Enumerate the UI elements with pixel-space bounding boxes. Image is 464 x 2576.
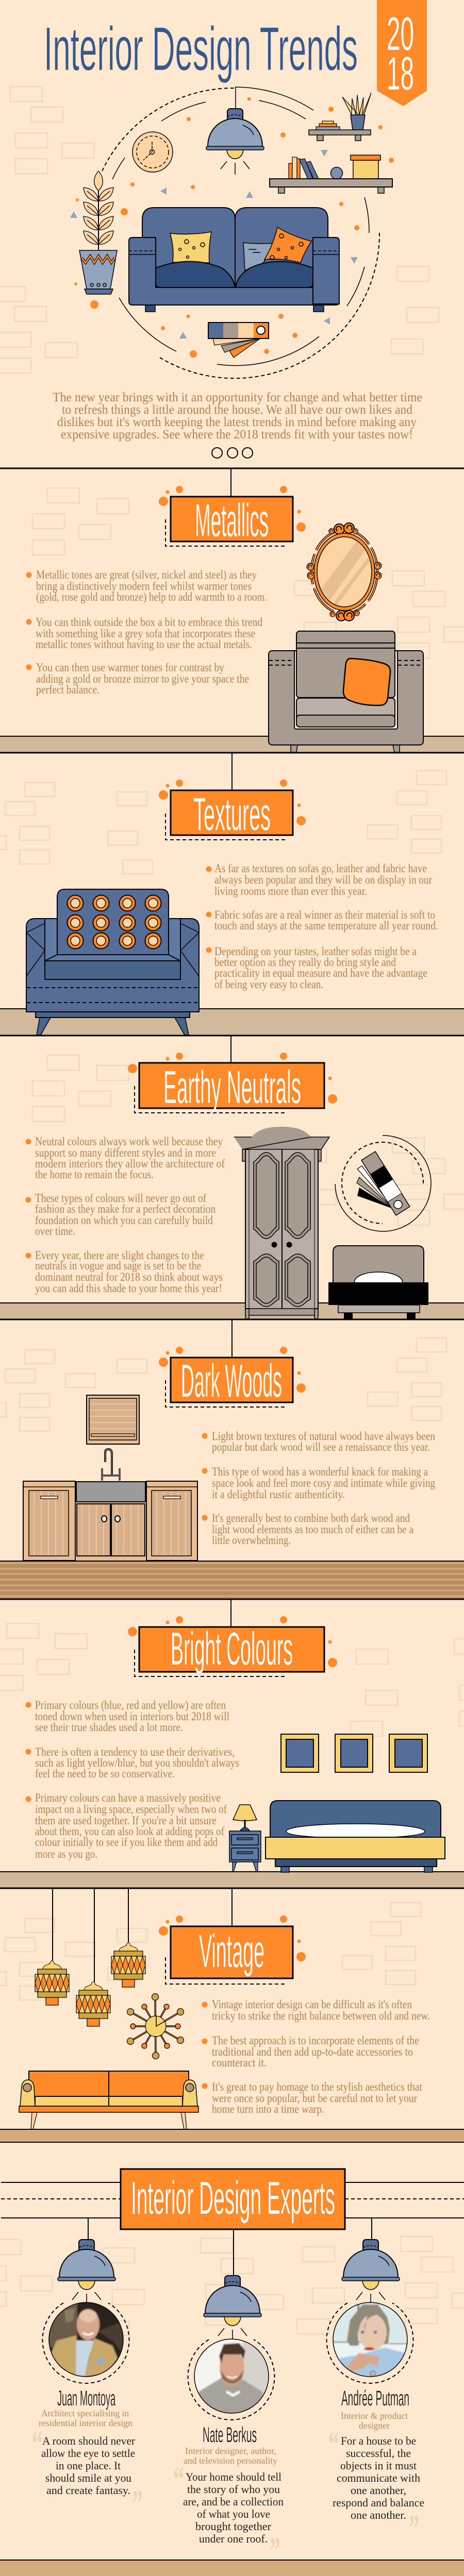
text: earthy bullets: you can add this shade to your home this year!	[35, 1282, 222, 1295]
metallics bricks	[32, 488, 464, 658]
vintage bricks	[0, 1903, 421, 2000]
quote: Nate Berkus	[173, 2460, 284, 2570]
intro text: The new year brings with it an opportunity for change and what better time	[53, 391, 422, 404]
text: dark woods bullets	[202, 1430, 435, 1547]
floor: textures	[0, 1009, 464, 1036]
text: vintage bullets: traditional and then add up-to-date accessories to	[212, 2045, 413, 2058]
expert: Andrée Putman: designer	[359, 2420, 390, 2431]
intro text: to refresh things a little around the house. We all have our own likes and	[62, 403, 412, 417]
text: metallics bullets: bring a distinctively modern feel whilst warmer tones	[36, 580, 252, 592]
text: vintage bullets	[202, 1998, 430, 2115]
quote: Juan Montoya: in one place. It	[56, 2459, 121, 2472]
heading: experts rail	[1, 2169, 464, 2229]
expert: Juan Montoya: residential interior design	[39, 2418, 132, 2428]
quote: Andrée Putman: successful, the	[346, 2447, 411, 2460]
text: vintage bullets: tricky to strike the right balance between old and new.	[212, 2009, 430, 2022]
text: earthy bullets: foundation on which you can carefully build	[35, 1214, 213, 1227]
icon: hanging lanterns	[35, 1888, 145, 2026]
icon: orange retro sofa	[19, 2071, 198, 2129]
quote: Andrée Putman: one another,	[351, 2484, 406, 2497]
text: bright bullets: see their true shades used a lot more.	[35, 1721, 183, 1734]
text: bright bullets: more as you go.	[35, 1848, 97, 1860]
quote: Juan Montoya: and create fantasy.	[46, 2484, 130, 2497]
bright bricks	[0, 1623, 464, 1736]
expert: Andrée Putman	[326, 2218, 424, 2548]
icon: grey armchair	[269, 631, 423, 752]
text: bright bullets: toned down when used in interiors but 2018 will	[35, 1710, 229, 1723]
floor: wooden boards	[0, 1561, 464, 1599]
icon: yellow bed	[266, 1801, 445, 1872]
text: bright bullets: about them, you can also look at adding pops of	[35, 1825, 224, 1838]
text: metallics bullets: You can think outside the box a bit to embrace this trend	[36, 616, 262, 629]
quote: Nate Berkus: under one roof.	[199, 2532, 268, 2545]
photo: Andrée Putman	[333, 2303, 407, 2376]
text: metallics bullets	[26, 568, 267, 696]
text: dark woods bullets: it a delightful rustic authenticity.	[212, 1488, 345, 1501]
text: textures bullets	[206, 862, 438, 991]
text: bright bullets: There is often a tendency to use their derivatives,	[35, 1745, 235, 1758]
panel: metallics	[0, 468, 464, 753]
heading: bright colours: Bright Colours	[171, 1623, 293, 1675]
heading: earthy neutrals	[128, 1053, 337, 1113]
quote: Juan Montoya: should smile at you	[45, 2471, 131, 2484]
expert: Nate Berkus: and television personality	[184, 2455, 277, 2466]
quote: Andrée Putman: one another.	[351, 2509, 406, 2521]
text: earthy bullets: Neutral colours always work well because they	[35, 1135, 223, 1148]
intro text: dislikes but it's worth keeping the latest trends in mind before making any	[57, 415, 417, 429]
text: vintage bullets: counteract it.	[212, 2056, 267, 2069]
text: vintage bullets: The best approach is to incorporate elements of the	[212, 2034, 419, 2047]
heading: metallics: Metallics	[195, 495, 269, 547]
panel: interior design experts	[0, 2169, 464, 2576]
quote: Nate Berkus: “	[173, 2460, 184, 2499]
floor: experts	[0, 2560, 464, 2576]
experts bricks	[0, 2236, 464, 2335]
text: textures bullets: As far as textures on sofas go, leather and fabric have	[214, 862, 427, 875]
heading: dark woods	[159, 1347, 306, 1407]
decorative dots	[74, 97, 394, 358]
text: bright bullets: Primary colours can have a massively positive	[35, 1791, 221, 1804]
text: metallics bullets: You can then use warmer tones for contrast by	[36, 661, 224, 674]
text: vintage bullets: were once so popular, but be careful not to let your	[212, 2092, 417, 2105]
quote: Juan Montoya: “	[32, 2424, 43, 2463]
icon: bedside table with lamp	[229, 1805, 261, 1872]
text: bright bullets: Primary colours (blue, red and yellow) are often	[35, 1699, 226, 1711]
text: earthy bullets: These types of colours will never go out of	[35, 1192, 206, 1205]
three circles divider	[212, 448, 253, 458]
text: vintage bullets: home turn into a time warp.	[212, 2103, 324, 2115]
panel: textures	[0, 753, 464, 1036]
text: vintage bullets: Vintage interior design can be difficult as it's often	[212, 1998, 412, 2011]
text: dark woods bullets: popular but dark wood will see a renaissance this year.	[212, 1440, 430, 1453]
panel: vintage	[0, 1888, 464, 2142]
icon: wall clock	[132, 132, 173, 172]
text: earthy bullets	[26, 1135, 225, 1295]
heading: vintage: Vintage	[199, 1926, 264, 1977]
text: metallics bullets: adding a gold or bronze mirror to give your space the	[36, 672, 249, 685]
text: earthy bullets: fashion as they make for a perfect decoration	[35, 1202, 216, 1215]
expert: Juan Montoya	[32, 2218, 143, 2523]
text: metallics bullets: Metallic tones are great (silver, nickel and steel) as they	[36, 568, 257, 581]
text: earthy bullets: the home to remain the focus.	[35, 1168, 154, 1181]
text: vintage bullets: It's great to pay homage to the stylish aesthetics that	[212, 2080, 423, 2093]
heading: textures	[159, 779, 306, 840]
quote: Nate Berkus: ”	[270, 2531, 280, 2570]
text: textures bullets: practicality in equal measure and have the advantage	[214, 967, 427, 979]
text: earthy bullets: Every year, there are slight changes to the	[35, 1249, 204, 1262]
panel: dark woods: Dark Woods	[181, 1355, 282, 1407]
quote: Nate Berkus: brought together	[195, 2520, 272, 2533]
floor: metallics	[0, 736, 464, 753]
panel: dark woods	[0, 1319, 464, 1599]
quote: Andrée Putman: “	[328, 2425, 339, 2464]
text: textures bullets: better option as they really do bring style and	[214, 956, 396, 969]
quote: Andrée Putman: ”	[409, 2509, 419, 2548]
expert: Andrée Putman: Interior & product	[341, 2411, 408, 2421]
dark woods bricks	[0, 1338, 446, 1431]
text: dark woods bullets: little overwhelming.	[212, 1534, 291, 1547]
icon: upper shelf with books and plant	[309, 93, 371, 141]
quote: Juan Montoya: allow the eye to settle	[41, 2447, 135, 2460]
quote: Juan Montoya	[32, 2424, 143, 2523]
expert: Juan Montoya: Architect specialising in	[41, 2408, 129, 2418]
text: earthy bullets: dominant neutral for 2018 so think about ways	[35, 1270, 223, 1283]
hero brick wall	[0, 87, 439, 373]
expert: Nate Berkus	[173, 2229, 284, 2570]
quote: Nate Berkus: the story of who you	[187, 2483, 280, 2496]
icon: neutral bed	[328, 1246, 428, 1319]
icon: kitchen window blind	[87, 1395, 139, 1444]
quote: Juan Montoya: A room should never	[42, 2434, 136, 2447]
text: earthy bullets: over time.	[35, 1225, 75, 1238]
icon: potted plant	[79, 171, 117, 294]
intro text: expensive upgrades. See where the 2018 trends fit with your tastes now!	[61, 428, 413, 442]
intro text	[53, 391, 422, 442]
photo: Nate Berkus	[195, 2339, 268, 2413]
text: metallics bullets: metallic tones without having to use the actual metals.	[36, 638, 252, 651]
quote: Juan Montoya: ”	[132, 2483, 143, 2523]
floor: vintage	[0, 2129, 464, 2142]
floor: earthy	[0, 1303, 464, 1319]
quote: Nate Berkus: of what you love	[197, 2507, 270, 2520]
text: earthy bullets: neutrals in vogue and sage is set to be the	[35, 1259, 201, 1272]
text: textures bullets: living rooms more than ever this year.	[214, 885, 367, 897]
icon: lower shelf with books, ball and box	[270, 155, 392, 193]
icon: wardrobe	[234, 1127, 329, 1319]
heading: bright colours	[128, 1616, 337, 1676]
year ribbon: 20	[387, 8, 414, 60]
panel: bright colours	[0, 1599, 464, 1888]
icon: three picture frames	[281, 1734, 427, 1772]
text: bright bullets: such as light yellow/blue, but you shouldn't always	[35, 1756, 239, 1769]
hero circle arcs	[102, 87, 379, 378]
decorative triangles	[70, 150, 358, 338]
expert: Juan Montoya: Juan Montoya	[57, 2386, 115, 2410]
text: bright bullets: impact on a living space, especially when two of	[35, 1803, 227, 1816]
icon: blue tufted armchair	[26, 889, 199, 1035]
quote: Nate Berkus: are, and be a collection	[183, 2495, 284, 2508]
text: metallics bullets: perfect balance.	[36, 683, 100, 696]
text: earthy bullets: support so many different styles and in more	[35, 1146, 216, 1159]
icon: ornate mirror	[307, 523, 382, 621]
icon: pendant lamp	[206, 87, 264, 175]
text: bright bullets: them are used together. If you're a bit unsure	[35, 1814, 217, 1827]
quote: Andrée Putman: For a house to be	[341, 2434, 416, 2447]
text: bright bullets: feel the need to be so conservative.	[35, 1767, 175, 1780]
quote: Andrée Putman: communicate with	[337, 2471, 420, 2484]
panel: earthy neutrals	[0, 1036, 464, 1319]
text: dark woods bullets: It's generally best to combine both dark wood and	[212, 1512, 410, 1524]
icon: colour swatches	[208, 323, 269, 358]
quote: Andrée Putman: respond and balance	[333, 2496, 424, 2509]
heading: textures: Textures	[193, 789, 271, 840]
text: metallics bullets: with something like a grey sofa that incorporates these	[36, 627, 255, 640]
icon: kitchen cabinets	[23, 1481, 197, 1561]
icon: blue sofa	[129, 208, 339, 312]
quote: Andrée Putman	[328, 2425, 424, 2548]
expert: Nate Berkus: Interior designer, author,	[185, 2446, 276, 2456]
text: textures bullets: of being very easy to clean.	[214, 978, 323, 991]
year ribbon	[377, 0, 427, 106]
quote: Andrée Putman: objects in it must	[340, 2459, 417, 2472]
text: bright bullets: colour initially to see if you like them and add	[35, 1836, 218, 1849]
text: textures bullets: Depending on your tastes, leather sofas might be a	[214, 945, 417, 958]
text: dark woods bullets: light wood elements as too much of either can be a	[212, 1523, 413, 1536]
icon: sunburst clock	[127, 1994, 184, 2059]
icon: faucet	[102, 1449, 120, 1481]
text: earthy bullets: modern interiors they allow the architecture of	[35, 1157, 225, 1170]
expert: Nate Berkus: Nate Berkus	[203, 2422, 257, 2447]
floor: bright	[0, 1872, 464, 1888]
photo: Juan Montoya	[49, 2303, 123, 2376]
text: bright bullets	[26, 1699, 239, 1860]
icon: neutral swatch fan	[335, 1136, 431, 1231]
earthy bricks	[32, 1055, 464, 1225]
heading: vintage	[159, 1916, 306, 1984]
quote: Nate Berkus: Your home should tell	[186, 2470, 281, 2483]
textures bricks	[0, 771, 446, 874]
heading: metallics	[159, 486, 306, 547]
year ribbon: 18	[387, 47, 414, 100]
text: metallics bullets: (gold, rose gold and bronze) help to add warmth to a room.	[36, 590, 267, 603]
